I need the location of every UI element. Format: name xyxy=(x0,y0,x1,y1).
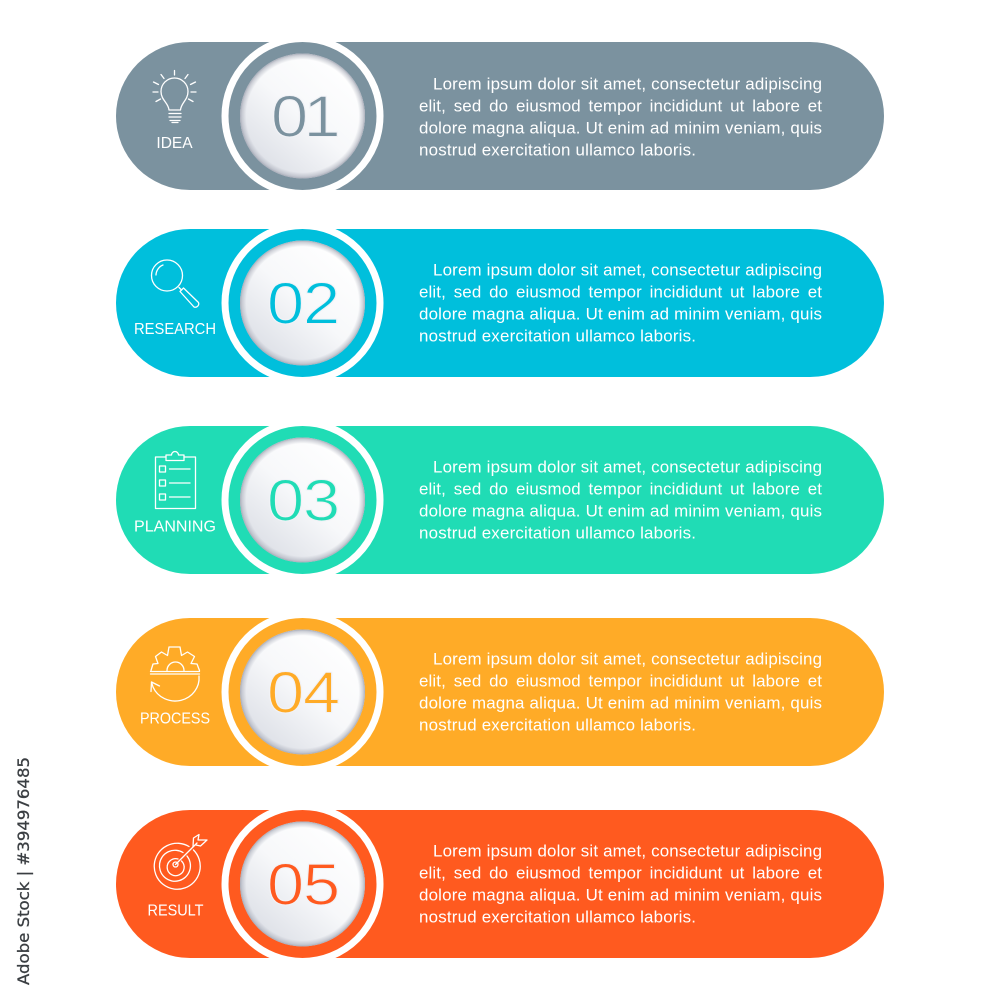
description text xyxy=(419,650,822,734)
description text: Lorem ipsum dolor sit amet, consectetur adipiscing xyxy=(433,458,822,476)
description text xyxy=(419,458,822,542)
pill background xyxy=(116,42,884,190)
description text: nostrud exercitation ullamco laboris. xyxy=(419,140,696,160)
label: research: RESEARCH xyxy=(134,321,216,338)
description text: Lorem ipsum dolor sit amet, consectetur adipiscing xyxy=(433,650,822,668)
description text: elit, sed do eiusmod tempor incididunt ut labore et xyxy=(419,96,822,116)
description text xyxy=(419,842,822,926)
description text: nostrud exercitation ullamco laboris. xyxy=(419,716,696,734)
description text: dolore magna aliqua. Ut enim ad minim veniam, quis xyxy=(419,304,822,324)
description text: elit, sed do eiusmod tempor incididunt ut labore et xyxy=(419,672,822,690)
icon: clipboard xyxy=(156,452,196,508)
number badge 01 xyxy=(225,38,380,194)
description text: dolore magna aliqua. Ut enim ad minim veniam, quis xyxy=(419,118,822,138)
description text: nostrud exercitation ullamco laboris. xyxy=(419,524,696,542)
icon: target and arrow xyxy=(154,834,207,889)
panel: step 05 result xyxy=(116,806,884,962)
description text: elit, sed do eiusmod tempor incididunt ut labore et xyxy=(419,480,822,498)
number badge 01: 01 xyxy=(271,85,338,149)
description text xyxy=(419,74,822,160)
label: planning: PLANNING xyxy=(134,518,216,536)
description text: Lorem ipsum dolor sit amet, consectetur adipiscing xyxy=(433,842,822,860)
number badge 05: 05 xyxy=(267,853,339,917)
panel: step 03 planning xyxy=(116,422,884,578)
description text: nostrud exercitation ullamco laboris. xyxy=(419,326,696,346)
panel: step 02 research xyxy=(116,226,884,380)
description text: elit, sed do eiusmod tempor incididunt ut labore et xyxy=(419,864,822,882)
icon: magnifier xyxy=(152,260,199,307)
number badge 02 xyxy=(225,226,380,380)
label: idea: IDEA xyxy=(156,135,193,152)
description text: dolore magna aliqua. Ut enim ad minim veniam, quis xyxy=(419,502,822,520)
side credit text: Adobe Stock | #394976485 xyxy=(14,757,33,985)
pill background xyxy=(116,229,884,377)
number badge 04: 04 xyxy=(267,661,339,725)
description text xyxy=(419,260,822,346)
number badge 05 xyxy=(225,806,380,962)
icon: light bulb xyxy=(153,70,196,122)
icon: gear and cycle xyxy=(150,647,200,701)
description text: Lorem ipsum dolor sit amet, consectetur adipiscing xyxy=(433,260,822,280)
number badge 03: 03 xyxy=(267,469,339,533)
panel: step 04 process xyxy=(116,614,884,770)
pill background xyxy=(116,810,884,958)
description text: Lorem ipsum dolor sit amet, consectetur adipiscing xyxy=(433,74,822,94)
number badge 02: 02 xyxy=(267,272,339,336)
number badge 03 xyxy=(225,422,380,578)
pill background xyxy=(116,618,884,766)
number badge 04 xyxy=(225,614,380,770)
description text: dolore magna aliqua. Ut enim ad minim veniam, quis xyxy=(419,694,822,712)
pill background xyxy=(116,426,884,574)
panel: step 01 idea xyxy=(116,38,884,194)
description text: elit, sed do eiusmod tempor incididunt ut labore et xyxy=(419,282,822,302)
description text: dolore magna aliqua. Ut enim ad minim veniam, quis xyxy=(419,886,822,904)
description text: nostrud exercitation ullamco laboris. xyxy=(419,908,696,926)
label: result: RESULT xyxy=(148,902,204,920)
label: process: PROCESS xyxy=(140,710,210,728)
